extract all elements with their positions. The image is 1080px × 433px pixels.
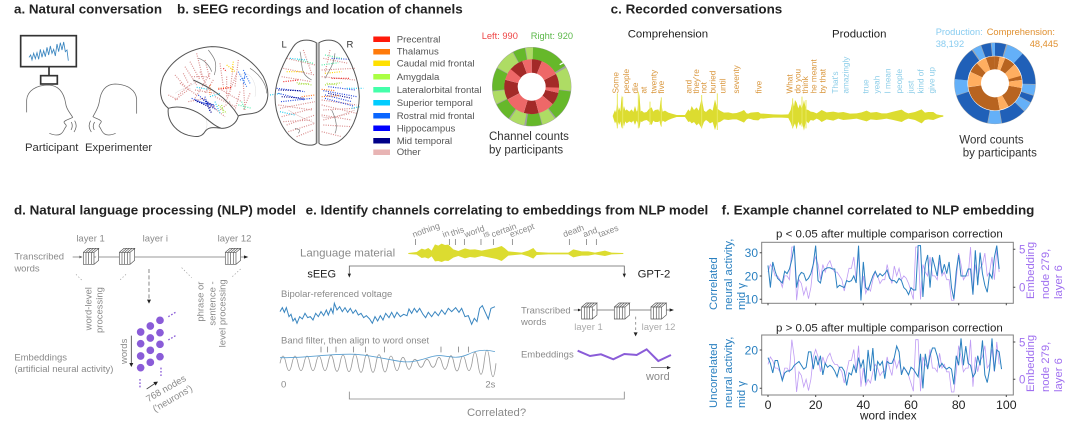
label: comprehension count: Comprehension:: [987, 27, 1055, 37]
label: production: Production: [832, 29, 886, 41]
diagram: GPT-2 layers and embeddings: phrase or: [196, 282, 207, 322]
diagram: GPT-2 layers and embeddings: sentence -: [208, 281, 219, 326]
axis label: uncorrelated neural activity: [708, 337, 748, 408]
axis label: embedding node bottom: Embedding: [1025, 335, 1037, 392]
spoken word labels: comprehension: five: [657, 80, 666, 94]
label: production count: 38,192: [936, 39, 964, 49]
axis label: embedding node top: [1025, 242, 1065, 299]
legend: brain regions: [373, 34, 481, 158]
icon: participant head: [27, 85, 76, 135]
spoken word labels: production: [831, 56, 937, 94]
diagram: language material to sEEG and GPT-2: this: [449, 224, 466, 238]
diagram: language material to sEEG and GPT-2: certain: [490, 221, 518, 239]
diagram: language material to sEEG and GPT-2: words: [520, 317, 547, 328]
diagram: GPT-2 layers and embeddings: words: [119, 338, 130, 365]
x axis label: word index: [859, 410, 917, 422]
heading e: e. Identify channels correlating to embeddings from NLP model: [306, 202, 708, 217]
lateral brain with channels: [161, 47, 268, 137]
donut: word counts: [947, 35, 1043, 131]
icon: experimenter head: [89, 84, 137, 135]
axis label: uncorrelated neural activity: mid γ: [736, 381, 748, 408]
chart title bottom: p > 0.05 after multiple comparison correction: [776, 323, 1003, 335]
diagram: language material to sEEG and GPT-2: in: [441, 228, 451, 240]
line chart: uncorrelated channel: 0: [751, 382, 758, 396]
label R: R: [346, 40, 354, 50]
label: production count: Production:: [936, 27, 983, 37]
caption: channel counts: Channel counts: [489, 131, 569, 143]
spoken word labels: comprehension: not: [699, 81, 708, 94]
legend: brain regions: Rostral mid frontal: [397, 111, 475, 122]
icon: monitor with neural trace: [21, 36, 76, 84]
label: comprehension count: 48,445: [1030, 39, 1058, 49]
label: participant: Participant: [25, 142, 79, 154]
diagram: language material to sEEG and GPT-2: and: [582, 225, 599, 239]
spoken word labels: production: just: [907, 80, 916, 94]
legend: brain regions: Precentral: [397, 34, 440, 45]
legend: brain regions: Lateralorbital frontal: [397, 85, 481, 96]
spoken word labels: comprehension: at: [639, 86, 648, 94]
label: right count: Right: 920: [531, 31, 573, 41]
spoken word labels: comprehension: Some: [612, 72, 621, 94]
caption: word counts: by participants: [963, 148, 1037, 160]
heading b: b. sEEG recordings and location of channels: [177, 2, 463, 16]
line chart: correlated channel: [745, 242, 1025, 307]
spoken word labels: comprehension: do you: [793, 68, 802, 94]
axis label: correlated neural activity: [708, 239, 748, 310]
spoken word labels: production: That's: [831, 71, 840, 94]
spoken word labels: comprehension: they're: [692, 69, 701, 94]
diagram: GPT-2 layers and embeddings: words: [13, 263, 40, 274]
line chart: uncorrelated channel: 0: [1019, 375, 1025, 387]
panel c: recorded conversations: [611, 2, 1058, 160]
spoken word labels: production: kind of: [917, 69, 926, 94]
diagram: language material to sEEG and GPT-2: death: [562, 222, 586, 239]
diagram: language material to sEEG and GPT-2: 0: [281, 379, 286, 390]
spoken word labels: comprehension: and: [684, 79, 693, 94]
diagram: language material to sEEG and GPT-2: [280, 220, 675, 419]
legend: brain regions: Other: [397, 147, 421, 158]
brain top outline: [275, 40, 359, 145]
axis label: embedding node top: layer 6: [1053, 265, 1065, 299]
panel d: NLP model: [13, 202, 296, 415]
panel b: sEEG recordings and channels: [161, 2, 578, 158]
diagram: GPT-2 layers and embeddings: word-level: [83, 287, 94, 331]
axis label: embedding node top: node 279,: [1040, 249, 1052, 299]
diagram: GPT-2 layers and embeddings: layer 12: [218, 234, 251, 245]
axis label: embedding node top: Embedding: [1025, 242, 1037, 299]
diagram: GPT-2 layers and embeddings: Transcribed: [14, 252, 64, 263]
spoken word labels: comprehension: think: [801, 75, 810, 94]
waveform: conversation audio: [613, 92, 943, 131]
line chart: correlated channel: 20: [745, 269, 758, 283]
spoken word labels: production: yeah: [873, 75, 882, 94]
diagram: language material to sEEG and GPT-2: Correlated?: [467, 407, 526, 419]
diagram: GPT-2 layers and embeddings: [13, 234, 251, 415]
brain outline: [161, 47, 268, 137]
diagram: language material to sEEG and GPT-2: word: [645, 371, 670, 383]
caption: channel counts: by participants: [489, 145, 563, 157]
legend: brain regions: Superior temporal: [397, 98, 473, 109]
diagram: language material to sEEG and GPT-2: world: [462, 223, 486, 240]
chart title top: p < 0.05 after multiple comparison correction: [776, 229, 1003, 241]
diagram: language material to sEEG and GPT-2: is: [482, 228, 492, 240]
spoken word labels: comprehension: What: [785, 74, 794, 94]
diagram: language material to sEEG and GPT-2: nothing: [411, 220, 441, 240]
caption: word counts: Word counts: [959, 134, 1024, 146]
spoken word labels: comprehension: seventy: [732, 64, 741, 94]
diagram: language material to sEEG and GPT-2: Embeddings: [521, 350, 574, 361]
heading f: f. Example channel correlated to NLP embedding: [722, 202, 1034, 217]
spoken word labels: comprehension: he meant: [809, 59, 818, 94]
label: left count: Left: 990: [482, 31, 518, 41]
spoken word labels: production: true: [862, 79, 871, 94]
axis label: correlated neural activity: Correlated: [708, 257, 720, 310]
heading c: c. Recorded conversations: [611, 2, 782, 16]
axis label: correlated neural activity: neural activity,: [723, 239, 735, 310]
axis label: embedding node bottom: [1025, 335, 1065, 392]
diagram: language material to sEEG and GPT-2: except: [508, 221, 536, 239]
label: experimenter: Experimenter: [85, 142, 152, 154]
diagram: language material to sEEG and GPT-2: 2s: [485, 379, 496, 390]
top-view brain with channels: [270, 40, 363, 145]
diagram: GPT-2 layers and embeddings: ('neurons'): [151, 383, 195, 415]
line chart: uncorrelated channel: 0: [765, 398, 772, 412]
spoken word labels: comprehension: people: [622, 68, 631, 94]
label: comprehension: Comprehension: [628, 29, 708, 41]
diagram: GPT-2 layers and embeddings: (artificial neural activity): [14, 364, 113, 375]
line chart: correlated channel: 10: [745, 293, 758, 307]
line chart: uncorrelated channel: 5: [1019, 337, 1025, 349]
diagram: language material to sEEG and GPT-2: layer 1: [574, 322, 603, 333]
spoken word labels: production: amazingly: [841, 56, 850, 94]
diagram: GPT-2 layers and embeddings: layer 1: [76, 234, 105, 245]
diagram: GPT-2 layers and embeddings: Embeddings: [14, 353, 67, 364]
spoken word labels: production: give up: [928, 67, 937, 94]
legend: brain regions: Mid temporal: [397, 136, 452, 147]
diagram: GPT-2 layers and embeddings: processing: [94, 287, 105, 333]
line chart: uncorrelated channel: 60: [904, 398, 918, 412]
line chart: correlated channel: 30: [745, 246, 758, 260]
axis label: uncorrelated neural activity: Uncorrelated: [708, 343, 720, 408]
diagram: GPT-2 layers and embeddings: level processing: [218, 279, 229, 347]
heading a: a. Natural conversation: [14, 2, 162, 16]
line chart: uncorrelated channel: [745, 335, 1025, 412]
donut: channel counts: [485, 40, 578, 133]
diagram: GPT-2 layers and embeddings: 768 nodes: [144, 373, 188, 405]
diagram: GPT-2 layers and embeddings: layer i: [143, 234, 168, 245]
axis label: uncorrelated neural activity: neural activity,: [723, 337, 735, 408]
spoken word labels: comprehension: buried: [709, 70, 718, 94]
diagram: language material to sEEG and GPT-2: taxes: [597, 223, 620, 239]
spoken word labels: comprehension: twenty: [649, 69, 658, 94]
axis label: embedding node bottom: layer 6: [1053, 358, 1065, 392]
line chart: uncorrelated channel: 40: [856, 398, 870, 412]
heading d: d. Natural language processing (NLP) model: [14, 202, 296, 217]
panel e: identify channels: [280, 202, 708, 419]
diagram: language material to sEEG and GPT-2: Band filter, then align to word onset: [281, 335, 430, 346]
legend: brain regions: Amygdala: [397, 72, 440, 83]
diagram: language material to sEEG and GPT-2: Language material: [300, 247, 395, 259]
axis label: correlated neural activity: mid γ: [736, 283, 748, 310]
diagram: language material to sEEG and GPT-2: GPT-2: [638, 269, 670, 281]
spoken word labels: production: people: [895, 68, 904, 94]
legend: brain regions: Hippocampus: [397, 124, 456, 134]
line chart: correlated channel: 0: [1019, 283, 1025, 295]
line chart: correlated channel: 5: [1019, 245, 1025, 257]
line chart: uncorrelated channel: 20: [809, 398, 823, 412]
legend: brain regions: Thalamus: [397, 47, 439, 58]
label L: L: [282, 40, 287, 50]
spoken word labels: comprehension: [612, 59, 828, 94]
spoken word labels: comprehension: five: [754, 80, 763, 94]
line chart: uncorrelated channel: 80: [952, 398, 966, 412]
diagram: language material to sEEG and GPT-2: Transcribed: [521, 305, 571, 316]
diagram: language material to sEEG and GPT-2: Bipolar-referenced voltage: [281, 289, 392, 300]
panel a: natural conversation: [14, 2, 162, 154]
axis label: embedding node bottom: node 279,: [1040, 342, 1052, 392]
diagram: language material to sEEG and GPT-2: layer 12: [642, 322, 675, 333]
spoken word labels: production: I mean: [883, 68, 892, 94]
legend: brain regions: Caudal mid frontal: [397, 59, 475, 70]
panel f: example channel: [708, 202, 1065, 422]
line chart: uncorrelated channel: 20: [745, 343, 758, 357]
diagram: language material to sEEG and GPT-2: sEEG: [307, 269, 336, 281]
spoken word labels: comprehension: die: [631, 82, 640, 94]
spoken word labels: comprehension: by that: [819, 68, 828, 94]
spoken word labels: comprehension: until: [719, 78, 728, 94]
line chart: uncorrelated channel: 100: [996, 398, 1017, 412]
